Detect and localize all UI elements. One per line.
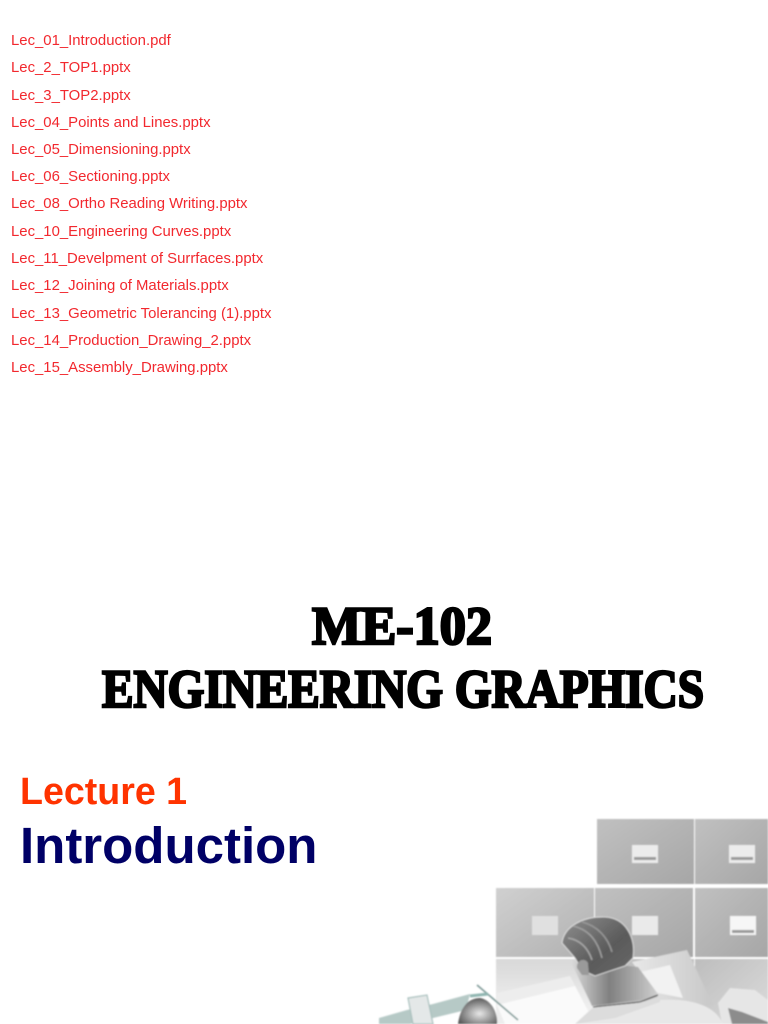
file list: Lec_05_Dimensioning.pptx [11, 142, 191, 158]
papers on desk [497, 950, 768, 1024]
cabinet drawers [496, 819, 768, 1024]
illustration: man at filing cabinets [378, 818, 768, 1024]
file list: Lec_13_Geometric Tolerancing (1).pptx [11, 306, 271, 322]
file list: Lec_08_Ortho Reading Writing.pptx [11, 196, 247, 212]
file list: Lec_14_Production_Drawing_2.pptx [11, 333, 251, 349]
hand and drawing tool [379, 985, 518, 1024]
file list: Lec_06_Sectioning.pptx [11, 169, 170, 185]
lecture number heading: Lecture 1 [20, 770, 187, 812]
file list: Lec_01_Introduction.pdf [11, 33, 171, 49]
man [562, 917, 723, 1024]
title: ME-102 [312, 596, 492, 656]
lecture topic heading: Introduction [20, 817, 317, 874]
file list: Lec_2_TOP1.pptx [11, 60, 131, 76]
title [102, 596, 704, 719]
file list: Lec_10_Engineering Curves.pptx [11, 224, 231, 240]
file list: Lec_04_Points and Lines.pptx [11, 115, 211, 131]
file list [11, 33, 272, 376]
file list: Lec_12_Joining of Materials.pptx [11, 278, 229, 294]
file list: Lec_15_Assembly_Drawing.pptx [11, 360, 228, 376]
file list: Lec_3_TOP2.pptx [11, 88, 131, 104]
file list: Lec_11_Develpment of Surrfaces.pptx [11, 251, 263, 267]
